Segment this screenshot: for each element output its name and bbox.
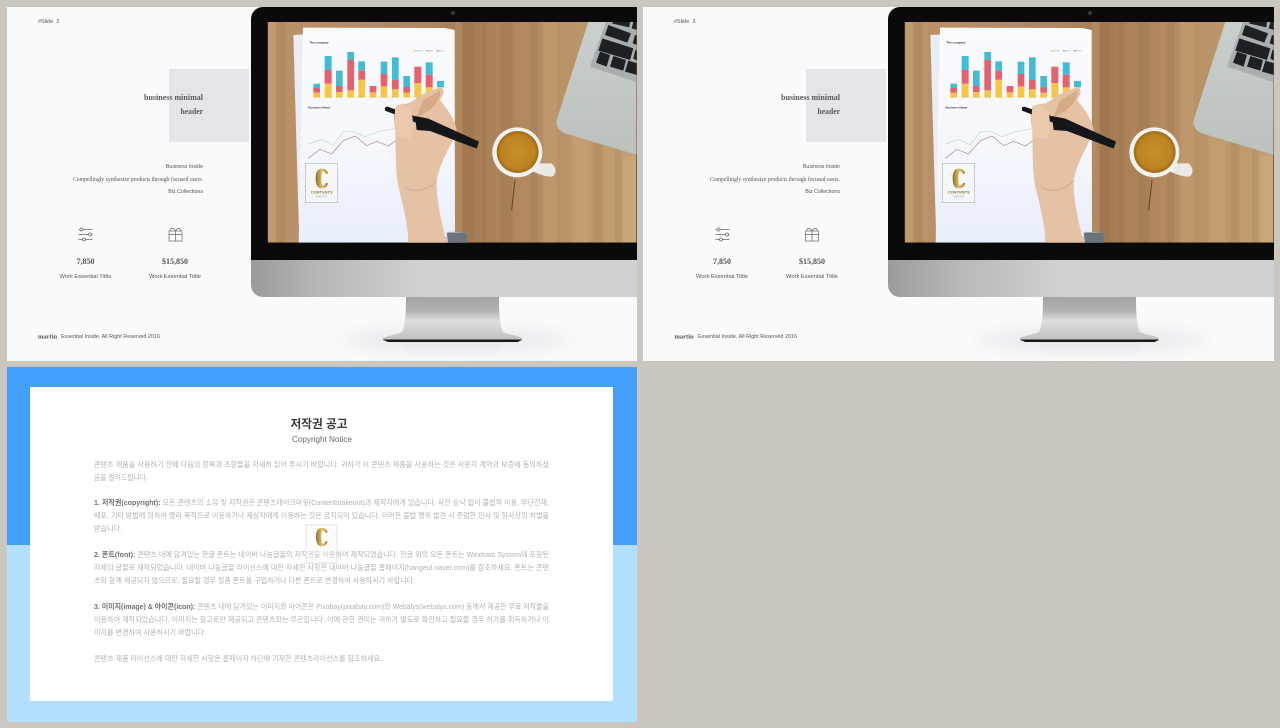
logo: TAKE OUT [316, 196, 328, 199]
text block: font: 자체의 글꼴로 제작되었습니다. 네이버 나눔글꼴 라이선스에 대한 자세한 사항은 네이버 나눔글꼴 홈페이지(hangeul.naver.com)를 참조하세요. 폰트는 콘텐 [94, 562, 549, 572]
text block: Biz Collections [805, 189, 840, 195]
stat: 7,850: Work Essential Tittle [696, 274, 748, 280]
photo: desk [905, 22, 1274, 243]
photo: desk [268, 22, 637, 243]
text block: copyright: 배포, 기타 방법에 의하여 영리 목적으로 이용하거나 제삼자에게 이용하는 것은 금지되어 있습니다. 이러한 불법 행위 발견 시 준엄한 민사 및 형사상의 처벌을 [94, 510, 549, 520]
header accent box [169, 69, 249, 142]
icon: gift [805, 228, 819, 241]
text block: license: 콘텐츠 제품 라이선스에 대한 자세한 사항은 홈페이지 하단에 기재한 콘텐츠라이선스를 참조하세요. [94, 653, 382, 663]
photo: desk: The company [946, 41, 966, 45]
text block: Compellingly synthesize products through focused users. [73, 176, 203, 183]
icon: gift [168, 228, 182, 241]
icon: sliders [716, 228, 730, 241]
heading: business minimal [781, 92, 841, 102]
header accent box [806, 69, 886, 142]
text block: image and icon: 3. 이미지(image) & 아이콘(icon): 콘텐츠 내에 담겨있는 이미지와 아이콘은 Pixabay(pixabay.com)와 Webalys(webalys.com) 등에서 제공한 무료 저작물을 [94, 601, 549, 611]
stat: 7,850 [696, 257, 748, 280]
stat: $15,850: Work Essential Tittle [786, 274, 838, 280]
watermark logo [306, 525, 337, 563]
footer: Essential Inside. All Right Reserved 2016 [61, 334, 160, 340]
stat: 7,850: Work Essential Tittle [60, 274, 112, 280]
text block: Compellingly synthesize products through focused users. [710, 176, 840, 183]
photo: desk: The company [309, 41, 329, 45]
text block: image and icon: 미지를 변경하여 사용하시기 바랍니다. [94, 627, 206, 637]
stat: $15,850: $15,850 [799, 257, 825, 266]
footer: martin [38, 334, 58, 340]
text block: font: 2. 폰트(font): 콘텐츠 내에 담겨있는 한글 폰트는 네이버 나눔글꼴의 저작권을 이용하여 제작되었습니다. 한글 외의 모든 폰트는 Windows System에 포함된 [94, 549, 549, 559]
text block: image and icon [94, 601, 549, 637]
text block [73, 164, 203, 195]
stat: $15,850 [786, 257, 838, 280]
heading: header [818, 106, 840, 116]
icon: sliders [78, 228, 92, 241]
text block: Biz Collections [168, 189, 203, 195]
text block: intro: 콘텐츠 제품을 사용하기 전에 다음의 항목과 조항들을 자세히 읽어 주시기 바랍니다. 귀하가 이 콘텐츠 제품을 사용하는 것은 사용자 계약과 보증에 동의하셨 [94, 459, 549, 469]
heading: header [180, 106, 203, 116]
footer [674, 334, 797, 340]
panel: copyright notice [7, 367, 637, 722]
heading: business minimal [144, 92, 204, 102]
monitor [888, 7, 1274, 360]
text block: font [94, 549, 549, 585]
logo: CONTENTS [948, 190, 970, 195]
footer [38, 334, 160, 340]
stat: $15,850: Work Essential Tittle [149, 274, 201, 280]
heading [781, 92, 841, 116]
panel: slide 2 [7, 7, 637, 361]
text block [710, 164, 840, 195]
text block: Business Inside [803, 164, 840, 170]
text block: copyright [94, 497, 549, 533]
logo [943, 163, 974, 203]
slide number: #Slide 3 [674, 19, 695, 25]
stat: $15,850 [149, 257, 201, 280]
photo: desk: Business News [308, 106, 331, 110]
stat: 7,850 [60, 257, 112, 280]
text block: copyright: 1. 저작권(copyright): 모든 콘텐츠의 소유 및 저작권은 콘텐츠테이크아웃(Contentstakeout)과 제작자에게 있습니다. 사전 승낙 없이 불법적 이용, 무단전재, [94, 497, 549, 507]
logo: CONTENTS [311, 190, 333, 195]
logo [306, 163, 337, 203]
text block: image and icon: 이용하여 제작되었습니다. 이미지는 참고로만 제공되고 콘텐츠와는 무관합니다. 이에 관한 권리는 귀하가 별도로 확인하고 필요할 경우 허가를 취득하거나 이 [94, 614, 549, 624]
logo: TAKE OUT [953, 196, 965, 199]
text block: intro [94, 459, 549, 482]
text block: intro: 음을 알려드립니다. [94, 472, 148, 482]
stat: 7,850: 7,850 [713, 257, 731, 266]
text block: copyright: 받습니다. [94, 523, 122, 533]
stat: $15,850: $15,850 [162, 257, 188, 266]
heading [144, 92, 204, 116]
subtitle: Copyright Notice [292, 434, 352, 444]
footer: martin [674, 334, 694, 340]
footer: Essential Inside. All Right Reserved 2016 [698, 334, 797, 340]
stat: 7,850: 7,850 [76, 257, 94, 266]
photo: desk: Business News [945, 106, 968, 110]
monitor [251, 7, 637, 360]
text block: font: 츠와 함께 제공되지 않으므로, 필요할 경우 정품 폰트를 구입하거나 다른 폰트로 변경하여 사용하시기 바랍니다. [94, 575, 415, 585]
text block: Business Inside [166, 164, 203, 170]
panel: slide 3 [643, 7, 1274, 361]
title: 저작권 공고 [290, 416, 348, 431]
slide number: #Slide 2 [38, 19, 59, 25]
